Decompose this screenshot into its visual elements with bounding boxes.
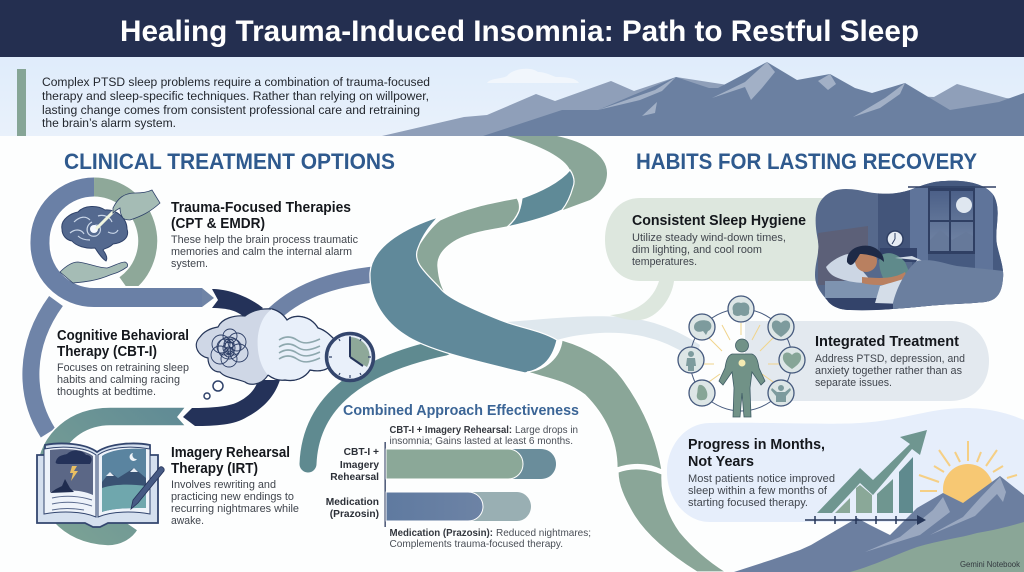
lower green ribbon lower part: [618, 469, 726, 572]
icon: rising sun: [919, 441, 1017, 514]
icon: bottom mountains: [734, 476, 1024, 572]
lower green ribbon upper part: [527, 340, 662, 470]
panel: cognitive behavioral therapy: [36, 289, 374, 546]
body text: dim lighting, and cool room: [632, 244, 762, 256]
alarm clock: [887, 231, 903, 247]
heading: Consistent Sleep Hygiene: [632, 213, 806, 229]
sleep hygiene speech bubble: [605, 198, 830, 320]
intro text: therapy and sleep-specific techniques. Rather than relying on willpower,: [42, 89, 429, 103]
head: [855, 254, 877, 272]
thought bubbles: [213, 381, 223, 391]
ring icon: joyful person: [768, 380, 794, 406]
bar labels: Rehearsal: [330, 472, 379, 483]
bottom annotation: Complements trauma-focused therapy.: [390, 539, 563, 550]
central figure: [719, 339, 765, 417]
body text: memories and calm the internal alarm: [171, 246, 352, 258]
heading: Cognitive Behavioral: [57, 328, 189, 344]
bar labels: Imagery: [340, 460, 379, 471]
left connecting arc: [31, 301, 56, 433]
intro accent bar: [17, 69, 26, 136]
body text: [632, 232, 786, 268]
header band: [0, 0, 1024, 57]
heading: [57, 328, 189, 360]
ring icon: stress shape: [689, 380, 715, 406]
window: [928, 188, 975, 254]
body text: habits and calming racing: [57, 374, 180, 386]
heading: Therapy (IRT): [171, 461, 258, 477]
ring icon: brain: [728, 296, 754, 322]
body text: These help the brain process traumatic: [171, 234, 359, 246]
bar labels: CBT-I +: [344, 447, 379, 458]
heading: habits for lasting recovery: HABITS FOR LASTING RECOVERY: [636, 149, 977, 174]
body text: anxiety together rather than as: [815, 365, 962, 377]
top annotation: Large drops in: [515, 425, 578, 436]
top annotation: [390, 425, 578, 447]
back mountains: [382, 77, 1024, 136]
icon: clock: [326, 334, 374, 380]
body text: starting focused therapy.: [688, 497, 808, 509]
heading: Progress in Months,: [688, 437, 825, 453]
heading: clinical treatment options: CLINICAL TREATMENT OPTIONS: [64, 149, 395, 174]
ring icon: standing person: [678, 347, 704, 373]
body text: sleep within a few months of: [688, 485, 827, 497]
body text: temperatures.: [632, 256, 697, 268]
progress bubble: [667, 408, 1024, 522]
torso: [879, 253, 908, 278]
body text: [57, 362, 189, 398]
ring icon: side brain: [689, 314, 715, 340]
heading: [688, 437, 825, 470]
icon: body with connected circles: [678, 296, 805, 417]
storm page: [50, 449, 93, 495]
bar labels: [326, 447, 379, 520]
curtains: [910, 186, 928, 262]
heading: Integrated Treatment: [815, 334, 959, 350]
snow highlights: [598, 62, 905, 117]
curtain rod: [908, 186, 996, 188]
teal small segment: [507, 170, 574, 227]
bar labels: (Prazosin): [330, 509, 379, 520]
navy arrow upper: [212, 289, 263, 318]
ring icon: heartbeat: [768, 314, 794, 340]
body text: Involves rewriting and: [171, 479, 276, 491]
pale branch to integrated treatment: [507, 316, 700, 360]
body text: Most patients notice improved: [688, 473, 835, 485]
heading: Not Years: [688, 454, 754, 470]
top annotation: insomnia; Gains lasted at least 6 months.: [390, 436, 573, 447]
icon: racing thoughts cloud: [196, 309, 335, 399]
integrated treatment bubble: [745, 321, 989, 401]
body text: Utilize steady wind-down times,: [632, 232, 786, 244]
intro text: Complex PTSD sleep problems require a combination of trauma-focused: [42, 75, 430, 89]
watermark: Gemini Notebook: [960, 560, 1021, 569]
pillow: [826, 254, 872, 283]
axis: [384, 442, 386, 527]
body text: Address PTSD, depression, and: [815, 353, 965, 365]
icon: open book: [37, 443, 164, 527]
big teal ribbon: [370, 217, 557, 373]
body text: separate issues.: [815, 377, 892, 389]
top green swoosh: [507, 136, 607, 210]
body text: awake.: [171, 515, 204, 527]
panel: trauma-focused therapies: [31, 187, 359, 433]
timeline arrow: [805, 515, 926, 525]
teal arrow into book: [36, 407, 186, 546]
pen: [131, 467, 164, 509]
cloud: [487, 69, 579, 83]
bottom annotation: Reduced nightmares;: [496, 528, 591, 539]
bed: [825, 281, 885, 301]
body text: practicing new endings to: [171, 491, 294, 503]
bar: Medication (Prazosin): [386, 492, 531, 521]
body text: thoughts at bedtime.: [57, 386, 156, 398]
panel: progress in months: [688, 430, 1024, 572]
heading: Therapy (CBT-I): [57, 344, 157, 360]
heading: [171, 445, 290, 477]
ring and arrow: [40, 187, 214, 307]
body text: [688, 473, 835, 509]
heading: Trauma-Focused Therapies: [171, 200, 351, 216]
bar: CBT-I + Imagery Rehearsal: [386, 449, 556, 479]
body text: [815, 353, 965, 389]
thought scribble: [211, 329, 248, 367]
blanket: [893, 260, 1004, 312]
arm: [862, 272, 908, 285]
icon: brain with hands: [60, 190, 160, 283]
panel: combined approach effectiveness chart: [326, 403, 591, 550]
panel: imagery rehearsal therapy: [37, 443, 299, 527]
front mountains: [483, 62, 1024, 136]
lower teal arc: [308, 347, 445, 464]
body text: [171, 479, 299, 527]
heading: (CPT & EMDR): [171, 216, 265, 232]
bottom annotation: [390, 528, 591, 550]
chart heading: Combined Approach Effectiveness: [343, 403, 579, 419]
body text: Focuses on retraining sleep: [57, 362, 189, 374]
bar labels: Medication: [326, 497, 379, 508]
heading: [171, 200, 351, 232]
intro text: the brain’s alarm system.: [42, 116, 176, 130]
body text: recurring nightmares while: [171, 503, 299, 515]
night table: [880, 248, 917, 262]
icon: growth chart: [817, 430, 927, 513]
panel: consistent sleep hygiene: [632, 176, 1010, 316]
sheet: [875, 256, 925, 304]
panel: integrated treatment: [678, 296, 965, 417]
central winding path: [270, 136, 726, 572]
intro text: lasting change comes from consistent professional care and retraining: [42, 103, 420, 117]
intro band with mountains: [0, 57, 1024, 136]
heading: Imagery Rehearsal: [171, 445, 290, 461]
green mid ribbon: [416, 198, 520, 296]
ring icon: heart: [779, 347, 805, 373]
navy arrow lower: [183, 380, 280, 426]
peaceful lake page: [102, 449, 146, 512]
upper hand: [113, 190, 160, 220]
title: Healing Trauma-Induced Insomnia: Path to Restful Sleep: [120, 15, 919, 48]
body text: system.: [171, 258, 208, 270]
top annotation: CBT-I + Imagery Rehearsal:: [390, 425, 512, 436]
intro text: [42, 75, 430, 130]
bottom annotation: Medication (Prazosin):: [390, 528, 493, 539]
lower hand: [60, 262, 128, 283]
glow rays: [694, 323, 788, 384]
body text: [171, 234, 359, 270]
calm waves: [279, 337, 320, 362]
icon: sleeping person in bedroom: [815, 180, 1004, 310]
headboard: [818, 226, 868, 285]
upper blue arc: [270, 274, 378, 318]
